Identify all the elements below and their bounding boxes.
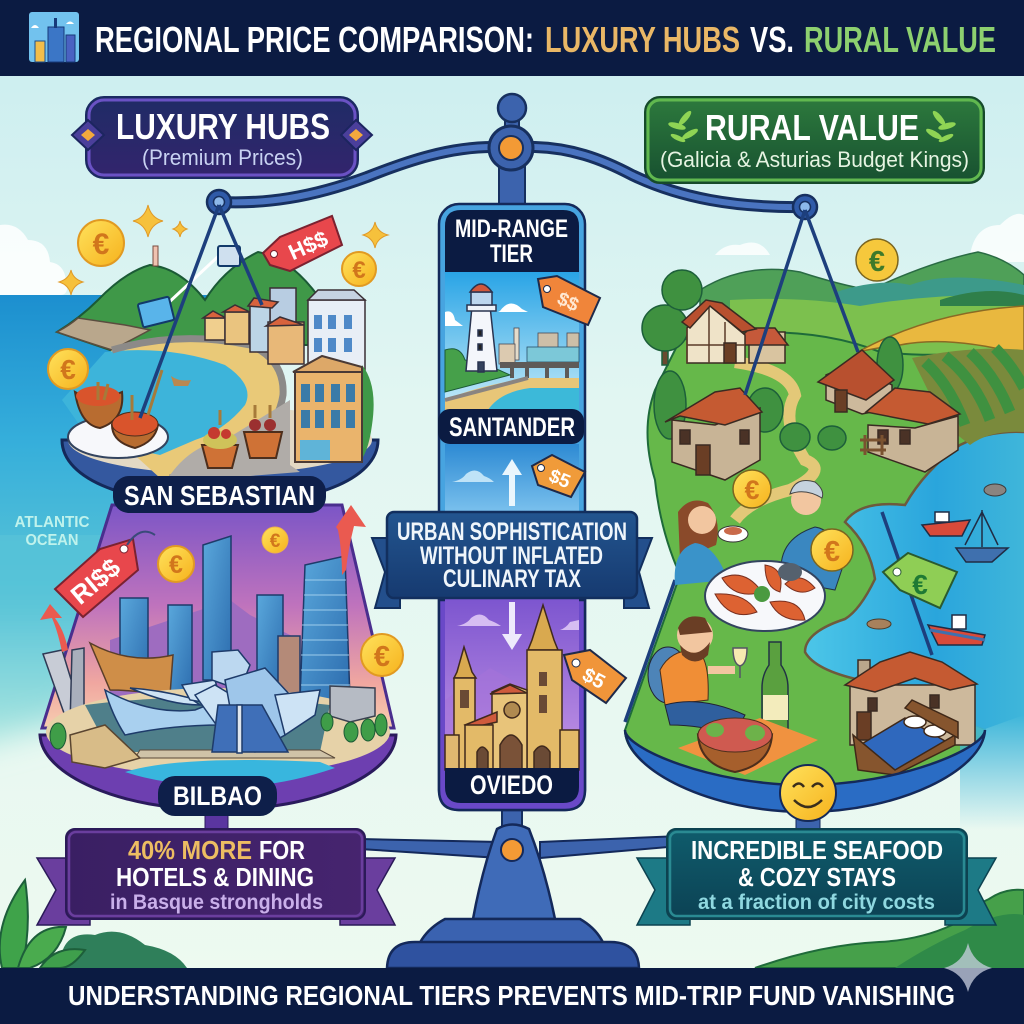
price tag H$$: H$$ bbox=[285, 226, 332, 265]
coins: € bbox=[169, 551, 183, 579]
price tag green euro bbox=[883, 553, 957, 608]
Santander scene bbox=[445, 272, 579, 410]
panel: Luxury Hubs heading bbox=[72, 97, 372, 178]
arrow: up bbox=[502, 459, 522, 506]
tier heading bbox=[445, 210, 579, 272]
price tag green euro: € bbox=[912, 569, 928, 600]
vineyard bbox=[912, 348, 1024, 445]
price tag RI$$: RI$$ bbox=[65, 552, 126, 610]
bowl sky bbox=[42, 505, 394, 728]
plate bbox=[40, 688, 396, 810]
scale strings bbox=[625, 210, 932, 722]
icon: city skyline bbox=[29, 12, 79, 62]
label: Bilbao: BILBAO bbox=[173, 781, 262, 811]
house stone back bbox=[818, 350, 894, 414]
label: Santander bbox=[438, 409, 584, 444]
panel: Bilbao scene bbox=[40, 505, 403, 810]
label: Oviedo bbox=[445, 768, 579, 803]
banner: urban sophistication: URBAN SOPHISTICATION bbox=[397, 518, 627, 546]
title: REGIONAL PRICE COMPARISON: bbox=[95, 19, 534, 60]
banner: urban sophistication bbox=[372, 512, 652, 608]
footer bar bbox=[0, 968, 1024, 1024]
price tag top $$: $$ bbox=[554, 289, 582, 317]
icon: sparkle watermark bbox=[944, 943, 992, 992]
callout: incredible seafood bbox=[637, 829, 996, 925]
price tag H$$ bbox=[263, 216, 342, 271]
house half-timbered bbox=[682, 300, 788, 363]
label: Santander: SANTANDER bbox=[449, 412, 575, 442]
coins bbox=[158, 527, 403, 676]
wheat field bbox=[858, 306, 1024, 355]
Oviedo scene bbox=[445, 598, 579, 770]
seafood plate bbox=[705, 561, 825, 631]
people: backpacker bbox=[648, 616, 747, 735]
plate bbox=[62, 406, 378, 505]
clouds bbox=[715, 214, 1024, 262]
panel: Luxury Hubs heading: LUXURY HUBS bbox=[116, 106, 330, 147]
tower stripes bbox=[301, 580, 350, 685]
label: Oviedo: OVIEDO bbox=[470, 770, 553, 800]
panel: Rural Value heading bbox=[645, 97, 984, 183]
title bbox=[95, 19, 996, 60]
price tag top $$ bbox=[538, 276, 600, 325]
tower windows bbox=[314, 315, 352, 352]
bay bbox=[62, 339, 285, 478]
panel: Mid-range tier column bbox=[438, 204, 626, 830]
foliage: bottom left leaves bbox=[0, 880, 187, 968]
label: San Sebastian: SAN SEBASTIAN bbox=[124, 480, 315, 511]
title: LUXURY HUBS bbox=[545, 19, 740, 60]
rock bbox=[867, 619, 891, 629]
coins: € bbox=[869, 246, 885, 278]
coins: € bbox=[352, 257, 366, 284]
callout: 40% more: 40% MORE bbox=[128, 835, 252, 865]
scale strings bbox=[140, 205, 262, 418]
price tag lower $5 bbox=[564, 650, 626, 703]
foliage: bottom right hills bbox=[755, 890, 1024, 968]
header bar bbox=[0, 0, 1024, 76]
coins bbox=[48, 220, 376, 389]
main land bbox=[625, 332, 1024, 808]
path bbox=[735, 362, 815, 520]
tier heading: MID-RANGE bbox=[455, 215, 568, 243]
sparkles bbox=[59, 205, 388, 295]
title: VS. bbox=[750, 19, 794, 60]
picnic blanket and bowl bbox=[678, 718, 818, 775]
banner: urban sophistication: CULINARY TAX bbox=[443, 565, 581, 593]
label: Atlantic Ocean: OCEAN bbox=[26, 532, 78, 549]
scale beam with pivot and finial bbox=[207, 94, 817, 219]
house stone front left bbox=[665, 388, 762, 480]
arrow: down bbox=[502, 602, 522, 650]
wine bottle bbox=[762, 642, 788, 736]
Guggenheim museum bbox=[105, 650, 320, 753]
coins: € bbox=[270, 531, 281, 552]
transition area upper bbox=[445, 444, 579, 514]
panel: Rural scene bbox=[625, 210, 1024, 831]
water bbox=[805, 432, 1024, 830]
callout: 40% more bbox=[37, 829, 395, 925]
price tag middle $5: $5 bbox=[546, 466, 574, 493]
town buildings bbox=[203, 288, 365, 372]
tier heading: TIER bbox=[490, 240, 533, 268]
hotel building bbox=[293, 356, 374, 463]
panel: Rural Value heading: RURAL VALUE bbox=[705, 107, 919, 148]
left ocean backdrop bbox=[0, 225, 210, 750]
trees bbox=[642, 270, 903, 451]
coins bbox=[733, 239, 898, 571]
banner: urban sophistication: WITHOUT INFLATED bbox=[420, 542, 603, 570]
tapas plate bbox=[68, 370, 168, 458]
cable car bbox=[138, 246, 240, 328]
price tag RI$$ bbox=[55, 532, 155, 617]
people: man bbox=[781, 480, 845, 590]
bridge sculpture bbox=[43, 648, 85, 730]
hills and coast bbox=[57, 246, 325, 350]
price tag middle $5 bbox=[532, 455, 585, 497]
arrow: rising price left bbox=[40, 604, 68, 652]
icon: smiley bbox=[780, 765, 836, 831]
skyline bbox=[110, 536, 350, 700]
plate rim bbox=[625, 730, 985, 812]
stone drum bbox=[70, 725, 140, 768]
price tag lower $5: $5 bbox=[579, 664, 609, 694]
coins: € bbox=[824, 536, 840, 568]
callout: 40% more: HOTELS & DINING bbox=[116, 862, 314, 892]
panel: San Sebastian scene bbox=[48, 205, 388, 505]
arrow: rising price right bbox=[336, 505, 366, 575]
callout: incredible seafood: INCREDIBLE SEAFOOD bbox=[691, 835, 943, 865]
coins: € bbox=[374, 641, 390, 673]
coins: € bbox=[93, 228, 110, 261]
boats bbox=[922, 510, 1008, 645]
callout: 40% more: FOR bbox=[259, 835, 305, 865]
icon: lighthouse bbox=[466, 284, 497, 372]
coins: € bbox=[60, 354, 76, 385]
label: Atlantic Ocean: ATLANTIC bbox=[14, 514, 90, 531]
fence bbox=[860, 435, 886, 455]
bed bbox=[853, 700, 958, 775]
callout: 40% more: in Basque strongholds bbox=[110, 891, 323, 914]
callout: incredible seafood: & COZY STAYS bbox=[738, 862, 896, 892]
coins: € bbox=[744, 475, 760, 505]
house stone front right bbox=[866, 388, 960, 472]
icon: cathedral bbox=[445, 605, 579, 770]
brown sculpture bbox=[90, 643, 173, 695]
tapas pots bbox=[202, 405, 282, 468]
scale base bbox=[360, 824, 680, 968]
label: Atlantic Ocean bbox=[14, 514, 90, 549]
concrete building bbox=[330, 686, 375, 722]
panel: Luxury Hubs heading: (Premium Prices) bbox=[142, 145, 303, 170]
trees bbox=[50, 713, 387, 760]
label: Bilbao bbox=[158, 776, 277, 832]
people: woman bbox=[675, 500, 748, 585]
callout: incredible seafood: at a fraction of city costs bbox=[698, 891, 935, 914]
pavement bbox=[168, 400, 300, 480]
panel: Rural Value heading: (Galicia & Asturias Budget Kings) bbox=[660, 147, 969, 172]
stone house bbox=[845, 652, 977, 745]
hills bbox=[700, 252, 1024, 370]
